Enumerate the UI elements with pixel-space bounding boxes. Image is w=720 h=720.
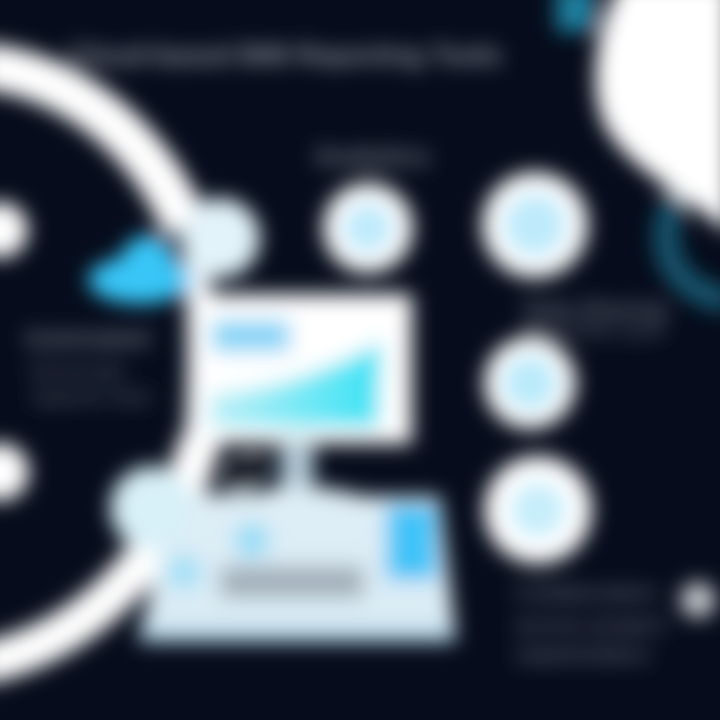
middle circle inner xyxy=(502,355,558,411)
cloud body xyxy=(88,256,192,304)
decorative white blob top right xyxy=(595,0,720,234)
middle circle outer xyxy=(484,337,576,429)
bottom circle outer xyxy=(484,456,592,564)
left body line two: reports fast xyxy=(30,384,152,409)
icon: left node top xyxy=(0,202,28,258)
icon: right circle middle xyxy=(484,337,576,429)
monitor stand xyxy=(280,438,314,508)
dark stand shadow xyxy=(222,456,270,495)
icon: right circle bottom xyxy=(484,456,592,564)
icon: center circle xyxy=(323,183,413,273)
text block: right bottom xyxy=(515,580,666,667)
icon: teal top square xyxy=(556,0,596,32)
top circle outer xyxy=(482,172,588,278)
text block: right top xyxy=(524,296,666,342)
text block: left xyxy=(24,325,152,409)
line three: stakeholders xyxy=(515,642,651,667)
node: top connector xyxy=(180,198,260,278)
heading: center column: Analytics xyxy=(314,141,430,171)
title: Cloud-based BIM Reporting Tools xyxy=(69,40,501,70)
icon: small grey dot xyxy=(680,582,716,618)
panel: monitor xyxy=(196,294,412,444)
small dot left xyxy=(166,554,202,590)
monitor screen xyxy=(196,294,412,444)
area chart xyxy=(210,342,382,428)
ring side xyxy=(192,225,200,450)
bottom circle inner xyxy=(510,482,566,538)
left body: Generate xyxy=(30,358,125,383)
teal ring right xyxy=(666,190,720,300)
cloud top xyxy=(121,235,175,289)
center circle inner xyxy=(342,202,394,254)
screen header bar xyxy=(212,320,290,352)
line one: Collaboration xyxy=(515,580,657,605)
icon: right circle top xyxy=(482,172,588,278)
base xyxy=(138,488,456,642)
ring lower arc xyxy=(0,440,200,664)
panel: keyboard base xyxy=(138,488,456,642)
left heading: Automated xyxy=(24,325,149,352)
blue block xyxy=(386,504,438,580)
cloud icon xyxy=(88,235,192,304)
keypad grey xyxy=(220,566,364,598)
line two: across project xyxy=(515,612,666,637)
small blue dot xyxy=(234,522,270,558)
center circle outer xyxy=(323,183,413,273)
right heading: Data Sharing xyxy=(524,296,666,322)
icon: left node bottom xyxy=(0,443,29,501)
top circle inner xyxy=(503,193,567,257)
ring upper arc xyxy=(0,66,186,228)
node: lower left xyxy=(110,466,194,550)
right body: Real-time sync xyxy=(524,320,666,342)
